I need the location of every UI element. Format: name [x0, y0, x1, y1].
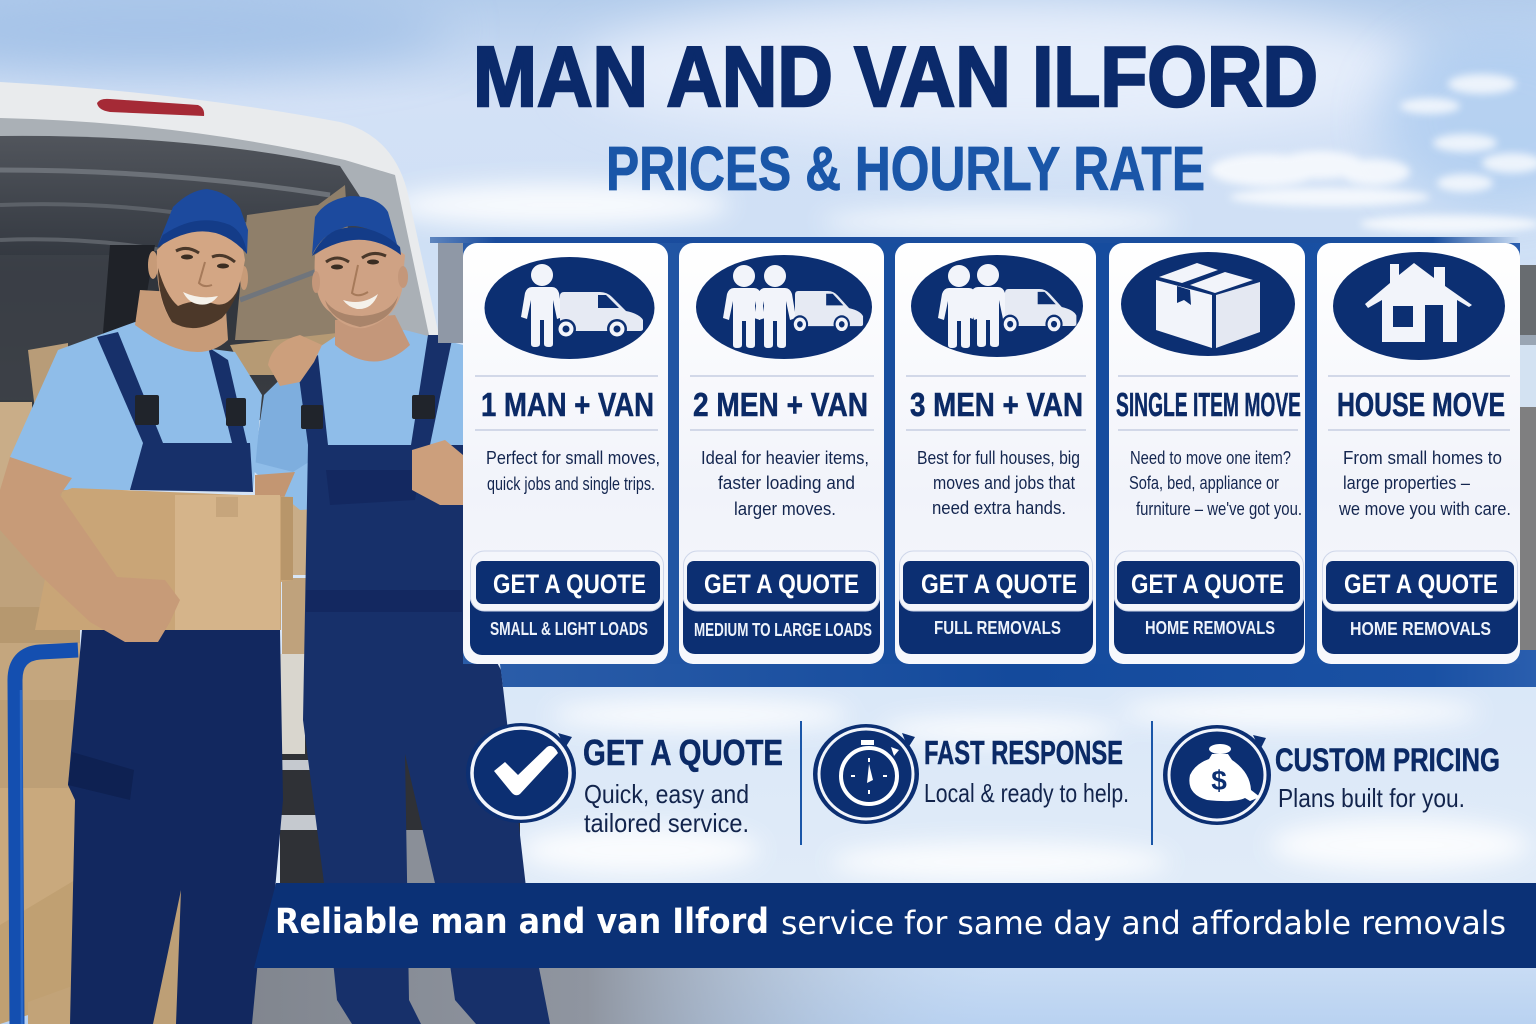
feature: fast response	[813, 724, 1129, 824]
description: Ideal for heavier items,	[701, 447, 869, 468]
right background building	[1520, 265, 1536, 665]
button: get a quote, small and light loads	[470, 551, 664, 655]
photo: boxes and hand truck	[0, 402, 310, 1024]
worker left	[0, 189, 293, 1024]
icon: two men and van	[696, 255, 872, 359]
tagline banner: service for same day and affordable removals	[781, 904, 1506, 942]
subtitle: PRICES & HOURLY RATE	[606, 135, 1205, 204]
description: need extra hands.	[932, 497, 1066, 518]
button: get a quote, full removals	[899, 551, 1093, 654]
description	[1129, 447, 1302, 519]
description: moves and jobs that	[933, 472, 1075, 493]
tagline banner: Reliable man and van Ilford	[275, 902, 769, 942]
feature: get a quote	[466, 723, 783, 838]
worker right hand on shoulder	[268, 335, 322, 386]
heading: 3 men + van: 3 MEN + VAN	[910, 386, 1083, 423]
description: faster loading and	[718, 472, 855, 493]
feature: custom pricing: Plans built for you.	[1278, 783, 1465, 813]
description: large properties –	[1343, 472, 1471, 493]
heading: 2 men + van: 2 MEN + VAN	[693, 386, 868, 423]
worker right	[252, 196, 550, 1024]
description	[701, 447, 869, 519]
button: get a quote, medium to large loads: GET A QUOTE	[704, 569, 859, 599]
feature: get a quote: Quick, easy and	[584, 779, 749, 809]
button: get a quote, home removals	[1114, 551, 1304, 654]
feature: get a quote: GET A QUOTE	[583, 732, 783, 773]
description: From small homes to	[1343, 447, 1502, 468]
blue pricing panel	[430, 237, 1536, 687]
button: get a quote, home removals: GET A QUOTE	[1131, 569, 1284, 599]
description: we move you with care.	[1338, 498, 1511, 519]
icon: check mark badge	[466, 723, 576, 823]
tagline banner	[254, 883, 1536, 968]
description	[917, 447, 1080, 518]
divider	[800, 721, 802, 845]
description: furniture – we've got you.	[1136, 498, 1302, 519]
button: get a quote, full removals: GET A QUOTE	[921, 569, 1077, 599]
button: get a quote, small and light loads: GET A QUOTE	[493, 569, 646, 599]
button: get a quote, medium to large loads: MEDIUM TO LARGE LOADS	[694, 620, 872, 640]
feature: fast response: FAST RESPONSE	[924, 734, 1123, 771]
icon: money bag badge: $	[1211, 765, 1227, 796]
panel: single item move	[1109, 243, 1305, 664]
button: get a quote, home removals	[1322, 551, 1518, 654]
panel: 3 men + van	[895, 243, 1096, 664]
button: get a quote, medium to large loads	[683, 551, 880, 654]
left background building	[438, 243, 463, 343]
button: get a quote, small and light loads: SMALL & LIGHT LOADS	[490, 619, 648, 639]
feature: fast response: Local & ready to help.	[924, 778, 1129, 808]
description: larger moves.	[734, 498, 836, 519]
divider	[1151, 721, 1153, 845]
icon: men and van	[911, 255, 1083, 357]
button: get a quote, home removals: HOME REMOVALS	[1145, 618, 1275, 638]
button: get a quote, home removals: HOME REMOVALS	[1350, 619, 1491, 639]
icon: stopwatch badge	[813, 724, 919, 824]
heading: single item move: SINGLE ITEM MOVE	[1116, 386, 1301, 423]
icon: house	[1333, 252, 1505, 360]
description: quick jobs and single trips.	[487, 473, 655, 494]
panel: 2 men + van	[679, 243, 884, 664]
description: Need to move one item?	[1130, 447, 1291, 468]
description	[1338, 447, 1511, 519]
icon: parcel box	[1121, 252, 1295, 356]
panel: house move	[1317, 243, 1520, 664]
description: Sofa, bed, appliance or	[1129, 472, 1279, 493]
panel: 1 man + van	[463, 243, 668, 664]
description: Best for full houses, big	[917, 447, 1080, 468]
description: Perfect for small moves,	[486, 447, 660, 468]
button: get a quote, home removals: GET A QUOTE	[1344, 569, 1498, 599]
description	[486, 447, 660, 494]
button: get a quote, full removals: FULL REMOVALS	[934, 618, 1061, 638]
photo: van and ground	[0, 82, 1000, 1024]
feature: custom pricing	[1163, 725, 1500, 825]
title: MAN AND VAN ILFORD	[473, 30, 1318, 125]
icon: money bag badge	[1163, 725, 1271, 825]
heading: 1 man + van: 1 MAN + VAN	[481, 386, 654, 423]
icon: one man and van	[484, 257, 654, 359]
feature: get a quote: tailored service.	[584, 808, 749, 838]
